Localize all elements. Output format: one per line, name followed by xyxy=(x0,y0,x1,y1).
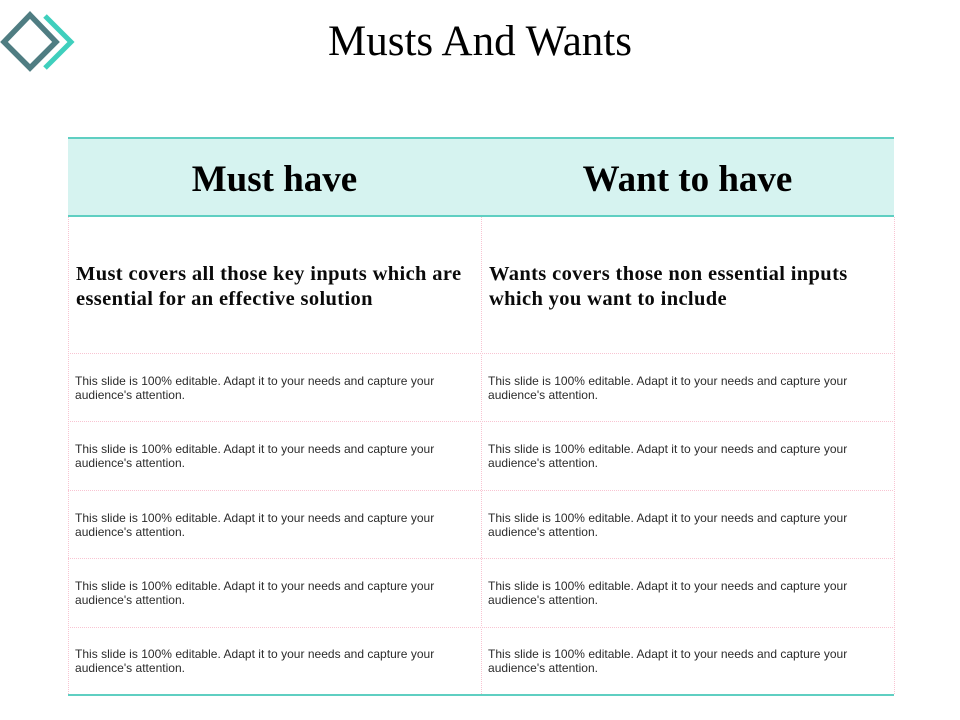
want row 3: This slide is 100% editable. Adapt it to your needs and capture your xyxy=(488,511,847,525)
must row 2: audience's attention. xyxy=(75,456,185,470)
must row 2: This slide is 100% editable. Adapt it to your needs and capture your xyxy=(75,442,434,456)
must row 5: This slide is 100% editable. Adapt it to your needs and capture your xyxy=(75,647,434,661)
must row 2 xyxy=(75,442,434,470)
heading: must have: Must have xyxy=(192,159,357,200)
must row 4 xyxy=(75,579,434,607)
must row 3 xyxy=(75,511,434,539)
table bottom border xyxy=(68,694,894,696)
heading: want to have: Want to have xyxy=(583,159,792,200)
want to have description xyxy=(489,263,848,310)
header band xyxy=(68,137,894,217)
logo icon xyxy=(0,11,74,72)
must row 5 xyxy=(75,647,434,675)
must row 4: audience's attention. xyxy=(75,593,185,607)
want row 4: This slide is 100% editable. Adapt it to your needs and capture your xyxy=(488,579,847,593)
want to have description: which you want to include xyxy=(489,288,727,310)
must row 3: This slide is 100% editable. Adapt it to your needs and capture your xyxy=(75,511,434,525)
want row 3 xyxy=(488,511,848,539)
must row 1: audience's attention. xyxy=(75,388,185,402)
want row 5: audience's attention. xyxy=(488,661,598,675)
must row 4: This slide is 100% editable. Adapt it to your needs and capture your xyxy=(75,579,434,593)
want row 5: This slide is 100% editable. Adapt it to your needs and capture your xyxy=(488,647,847,661)
want to have description: Wants covers those non essential inputs xyxy=(489,263,848,285)
want row 3: audience's attention. xyxy=(488,525,598,539)
must row 5: audience's attention. xyxy=(75,661,185,675)
title: Musts And Wants xyxy=(328,18,632,65)
want row 1: This slide is 100% editable. Adapt it to your needs and capture your xyxy=(488,374,847,388)
must row 3: audience's attention. xyxy=(75,525,185,539)
want row 2 xyxy=(488,442,848,470)
want row 2: audience's attention. xyxy=(488,456,598,470)
must have description xyxy=(76,263,461,310)
want row 5 xyxy=(488,647,848,675)
must row 1: This slide is 100% editable. Adapt it to your needs and capture your xyxy=(75,374,434,388)
must have description: Must covers all those key inputs which are xyxy=(76,263,461,285)
want row 2: This slide is 100% editable. Adapt it to your needs and capture your xyxy=(488,442,847,456)
must have description: essential for an effective solution xyxy=(76,288,373,310)
must row 1 xyxy=(75,374,434,402)
want row 1: audience's attention. xyxy=(488,388,598,402)
want row 4 xyxy=(488,579,848,607)
want row 1 xyxy=(488,374,848,402)
want row 4: audience's attention. xyxy=(488,593,598,607)
